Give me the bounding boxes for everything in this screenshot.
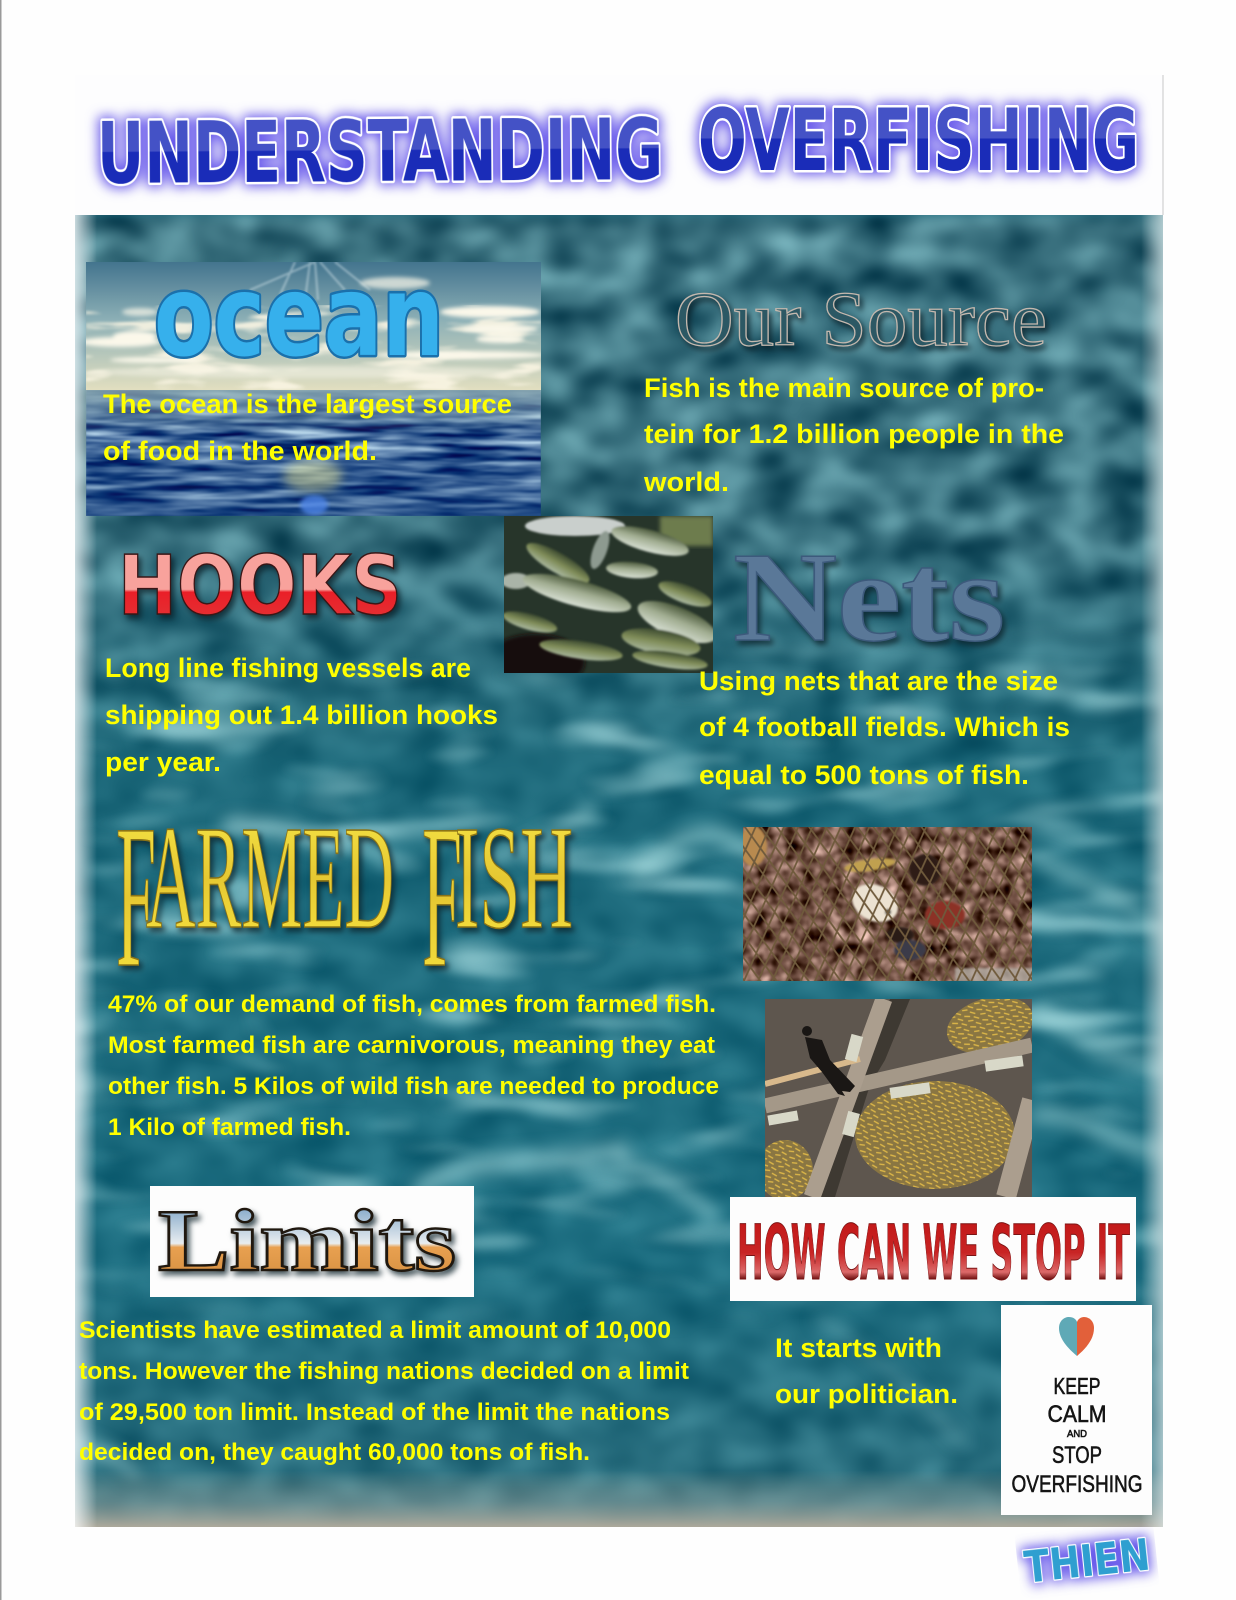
text: farmed fish: Most farmed fish are carnivorous, meaning they eat (108, 1032, 715, 1059)
title banner (75, 75, 1164, 215)
heading: how can we stop it (730, 1197, 1136, 1301)
heading: limits: Limits (158, 1193, 456, 1290)
photo: ocean horizon (80, 262, 545, 516)
heading: our source: Our Source (675, 275, 1047, 362)
heading: farmed fish: F (422, 783, 462, 1010)
text: hooks: Long line fishing vessels are (105, 653, 471, 683)
photo: fish farm pens (765, 999, 1032, 1197)
text: nets: Using nets that are the size (699, 666, 1058, 696)
heading: farmed fish: ARMED (146, 796, 394, 960)
heading: ocean: ocean (154, 252, 444, 382)
icon: heart (1059, 1317, 1094, 1356)
text: our source: Fish is the main source of pro- (644, 373, 1044, 403)
text: nets: equal to 500 tons of fish. (699, 760, 1029, 790)
heading: nets: Nets (733, 526, 1005, 668)
text: our source: tein for 1.2 billion people in the (644, 419, 1064, 449)
photo: school of fish (504, 516, 713, 673)
poster: keep calm (1001, 1305, 1152, 1515)
text: ISH (455, 796, 573, 960)
text: farmed fish: 1 Kilo of farmed fish. (108, 1114, 351, 1141)
text: our source: world. (643, 467, 729, 497)
text: limits: tons. However the fishing nations decided on a limit (79, 1358, 689, 1385)
text: ocean (103, 389, 512, 466)
text: limits: of 29,500 ton limit. Instead of the limit the nations (79, 1399, 670, 1426)
text: it starts (775, 1333, 958, 1409)
text: nets: of 4 football fields. Which is (699, 712, 1070, 742)
text: limits: Scientists have estimated a limit amount of 10,000 (79, 1317, 671, 1344)
panel: ocean water background (75, 215, 1163, 1527)
text: hooks (105, 653, 498, 777)
text: ocean: of food in the world. (103, 436, 377, 466)
text: hooks: shipping out 1.4 billion hooks (105, 700, 498, 730)
poster: keep calm: CALM (1048, 1401, 1106, 1428)
text: farmed fish: other fish. 5 Kilos of wild fish are needed to produce (108, 1073, 719, 1100)
text: limits: decided on, they caught 60,000 tons of fish. (79, 1439, 590, 1466)
signature: thien: THIEN (1022, 1530, 1152, 1593)
text: it starts: our politician. (775, 1379, 958, 1409)
heading: farmed fish: F (116, 783, 156, 1010)
text: farmed fish: 47% of our demand of fish, comes from farmed fish. (108, 991, 716, 1018)
text: limits (79, 1317, 689, 1466)
poster: keep calm: AND (1067, 1429, 1087, 1440)
text: it starts: It starts with (775, 1333, 942, 1363)
poster: keep calm: STOP (1052, 1442, 1102, 1469)
text: hooks: per year. (105, 747, 221, 777)
title: Understanding: UNDERSTANDING (97, 101, 663, 204)
heading: limits (150, 1186, 474, 1297)
heading: hooks: HOOKS (118, 539, 402, 634)
text: our source (643, 373, 1064, 497)
text: farmed fish (108, 991, 719, 1141)
poster: keep calm: OVERFISHING (1012, 1471, 1142, 1498)
text: ocean: The ocean is the largest source (103, 389, 512, 419)
text: nets (699, 666, 1070, 790)
poster: keep calm: KEEP (1054, 1373, 1100, 1399)
heading: farmed fish (116, 783, 573, 1010)
photo: fish caught in net (739, 826, 1035, 982)
